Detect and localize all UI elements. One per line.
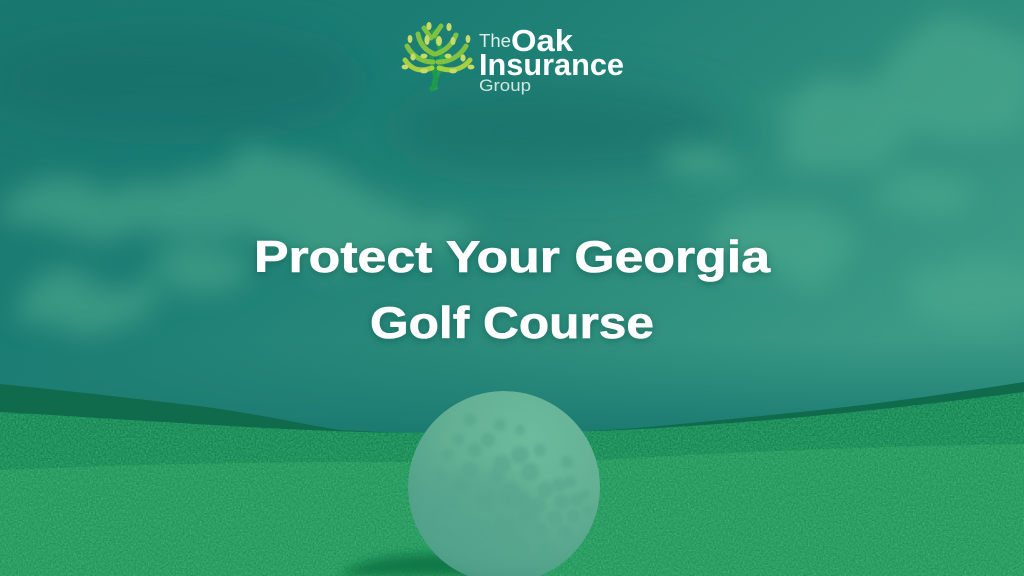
fairway grass — [0, 392, 1024, 576]
logo icon: oak tree — [402, 22, 474, 90]
background: sky — [0, 0, 1024, 432]
logo — [402, 22, 624, 95]
logo wordmark: The — [479, 31, 511, 51]
ball lower shading — [411, 473, 528, 569]
title line 2: Golf Course — [370, 299, 654, 348]
golf ball shadow — [340, 554, 480, 576]
logo wordmark: Oak — [511, 23, 574, 58]
title — [254, 233, 771, 348]
logo wordmark — [479, 23, 624, 95]
dark sky patches — [78, 54, 716, 174]
treeline on the horizon — [0, 382, 1024, 434]
clouds left — [0, 156, 470, 322]
title line 1: Protect Your Georgia — [254, 233, 771, 282]
logo wordmark: Group — [479, 76, 531, 95]
golf ball — [400, 391, 600, 576]
logo wordmark: Insurance — [479, 47, 624, 82]
ball dimples — [446, 416, 587, 520]
clouds right — [650, 30, 1024, 320]
